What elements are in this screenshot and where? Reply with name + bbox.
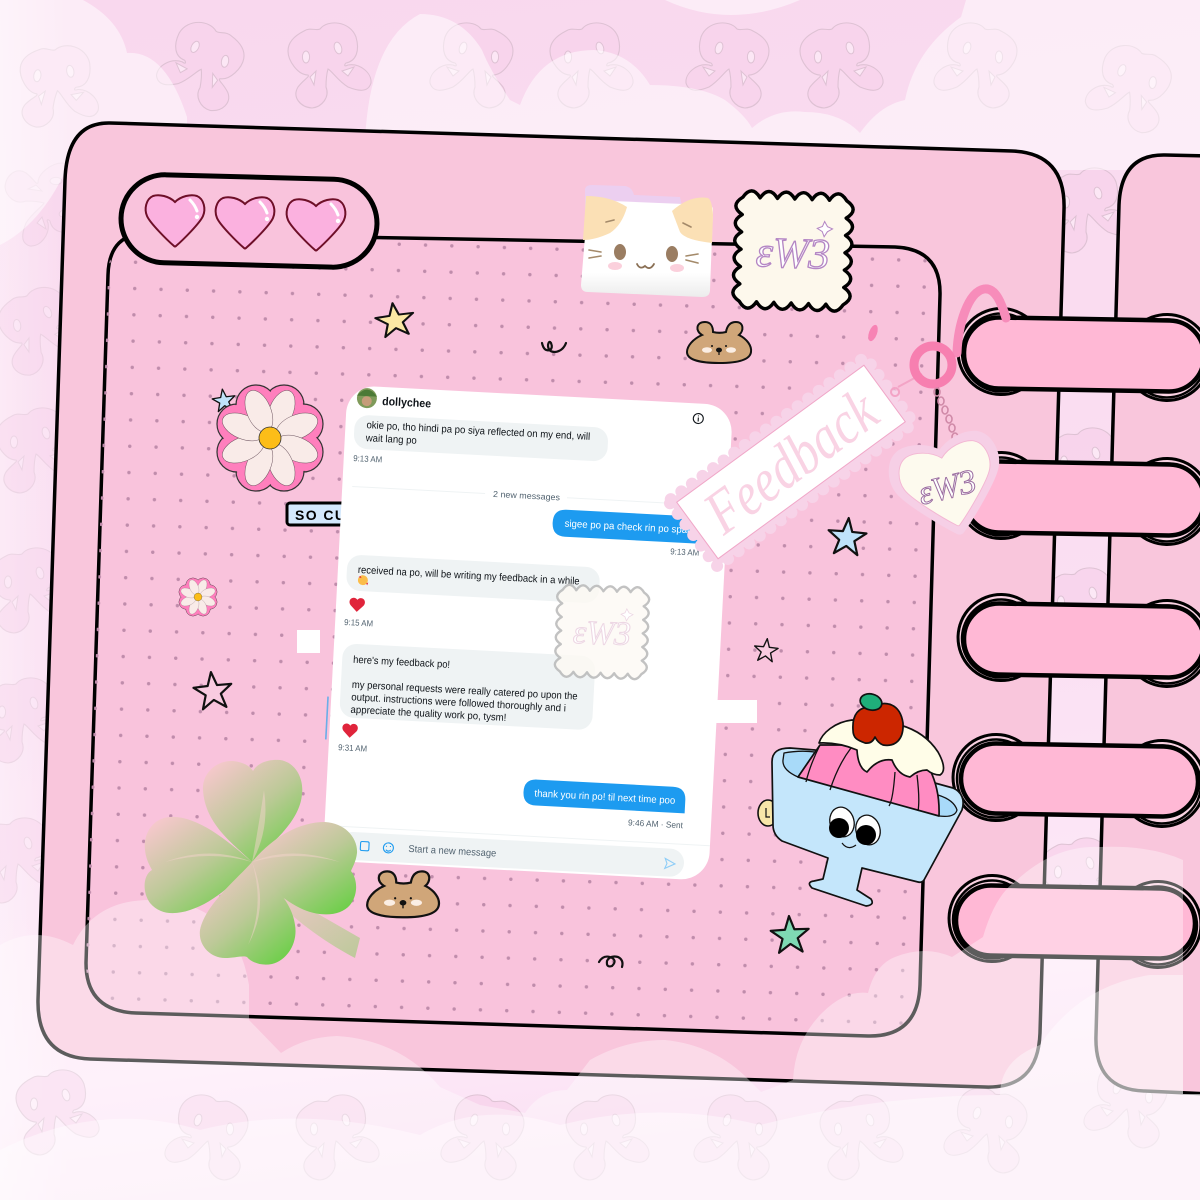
new messages divider [352, 482, 719, 511]
sticker: bear bottom [367, 871, 439, 917]
leaf right [252, 822, 357, 914]
icon: gif [360, 841, 369, 851]
white tab [716, 700, 757, 723]
heart 1 [146, 195, 204, 246]
message bubble 3: appreciate the quality work po, tysm! [350, 705, 507, 724]
squiggle lower [599, 956, 622, 967]
username: dollychee [382, 396, 431, 411]
lighter cloud layer [0, 975, 1200, 1200]
left edge glow [0, 0, 70, 1200]
leaf bottom [200, 862, 296, 965]
timestamp: 9:13 AM [353, 453, 382, 465]
keychain: feedback tag [668, 357, 914, 567]
sent bubble 1 [552, 509, 718, 545]
tag lettering: Feedback [691, 376, 891, 548]
leaf left [145, 817, 252, 913]
heart 2 [216, 197, 274, 248]
message bubble 1 [353, 415, 609, 462]
ring 5 [948, 875, 1200, 968]
sent bubble 1: sigee po pa check rin po span [564, 519, 693, 536]
jelly ridges [806, 745, 919, 811]
ghost stamp: εW3 [572, 614, 632, 653]
sent bubble 2 [523, 779, 686, 813]
ring 1 [957, 308, 1200, 401]
sticker: so cute label [287, 503, 357, 525]
icon: scalloped logo stamp [732, 190, 854, 312]
icon: yellow sticker behind sundae [758, 800, 778, 826]
message bubble 3 [339, 643, 596, 730]
ring 2 [957, 452, 1200, 545]
keychain: heart charm: εW3 [915, 463, 980, 513]
ring 4 [952, 734, 1200, 827]
sent bubble 2: thank you rin po! til next time poo [534, 788, 676, 807]
icon: jelly sundae [772, 691, 963, 906]
icon: small flower [179, 578, 217, 616]
squiggle [542, 342, 566, 352]
face [827, 804, 883, 848]
leaf top [203, 760, 302, 862]
sticker: green star [770, 915, 810, 953]
sticker: pink star left [192, 670, 234, 710]
sent status: 9:46 AM · Sent [628, 817, 684, 830]
hearts pill [120, 174, 378, 268]
panel: right page [1096, 155, 1200, 1094]
composer bar [328, 826, 710, 879]
panel: inner dotted page [86, 233, 940, 1036]
message bubble 2: received na po, will be writing my feedback in a while [358, 565, 580, 588]
avatar [356, 388, 377, 409]
binder rings [948, 308, 1200, 968]
sticker: yellow star [374, 301, 416, 338]
sticker: small blue star [211, 388, 237, 412]
sticker: blue star right [827, 516, 868, 556]
blue selection mark [325, 696, 329, 740]
leaf creases [165, 790, 340, 945]
panel: chat screenshot [319, 385, 733, 881]
white square [297, 630, 320, 653]
timestamp: 9:31 AM [338, 742, 367, 754]
message bubble 3: output. instructions were followed thoroughly and i [351, 692, 566, 714]
info icon [693, 413, 704, 424]
message bubble 3: my personal requests were really catered po upon the [352, 680, 578, 703]
foreground translucent clouds [0, 847, 1200, 1200]
sticker: so cute label: SO CU [295, 507, 346, 523]
timestamp: 9:15 AM [344, 617, 373, 628]
message bubble 1: okie po, tho hindi pa po siya reflected on my end, will [366, 420, 590, 443]
keychain: chain [934, 388, 962, 450]
icon: cat folder [581, 185, 713, 297]
dot grid [86, 232, 942, 1038]
stem [270, 895, 360, 958]
message bubble 1: wait lang po [365, 433, 417, 447]
new messages divider: 2 new messages [493, 489, 560, 502]
icon: big flower [217, 385, 323, 491]
icon: clover [145, 760, 360, 965]
cherry [853, 704, 903, 745]
clouds behind the planner [0, 0, 1200, 245]
droplet [866, 324, 880, 342]
bowl [772, 748, 963, 906]
ghost stamp [554, 584, 650, 680]
cherry leaf [858, 691, 884, 713]
icon: scalloped logo stamp: εW3 [755, 229, 831, 279]
sticker: small pink star [753, 637, 779, 662]
jelly [798, 745, 939, 816]
panel: outer planner page [38, 123, 1064, 1087]
message bubble 2 [346, 554, 600, 604]
keychain: hook [957, 289, 1006, 353]
sticker: bear top [687, 322, 751, 363]
icon: send [665, 858, 675, 869]
icon: smile [383, 843, 394, 853]
keychain: ring [914, 346, 952, 384]
cream [819, 720, 944, 777]
heart 3 [287, 199, 345, 250]
bowl inside [783, 751, 957, 816]
ring 3 [957, 594, 1200, 687]
reaction heart [342, 723, 358, 738]
keychain: heart charm [887, 430, 1011, 544]
reaction heart [349, 598, 365, 612]
timestamp: 9:13 AM [670, 546, 700, 558]
keychain: links to tag [891, 374, 922, 396]
message bubble 3: here's my feedback po! [353, 655, 450, 671]
input placeholder: Start a new message [408, 844, 497, 860]
